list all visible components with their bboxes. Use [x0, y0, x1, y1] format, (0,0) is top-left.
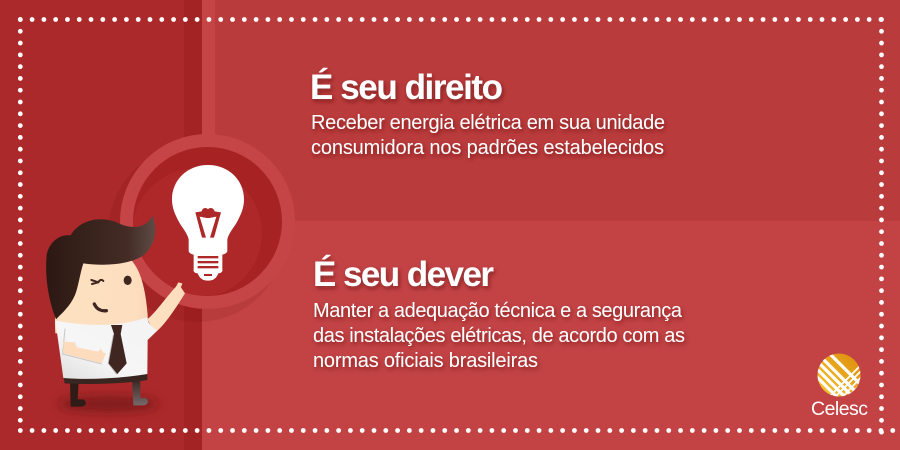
text block: dever: [313, 300, 685, 372]
logo: Celesc: [812, 354, 868, 415]
open eye: [124, 276, 132, 285]
heading: É seu direito: É seu direito: [310, 67, 503, 107]
text block: direito: Receber energia elétrica em sua unidade: [311, 112, 665, 134]
text block: direito: [311, 112, 665, 159]
icon: light bulb: [172, 165, 244, 281]
hair: [46, 215, 155, 319]
smile: [94, 304, 106, 311]
shirt: [55, 317, 157, 379]
folded arm: [63, 329, 106, 364]
character: office worker pointing at the bulb: [46, 215, 185, 412]
necktie: [108, 325, 127, 375]
trousers: [63, 374, 147, 384]
text block: dever: Manter a adequação técnica e a segurança: [313, 300, 683, 322]
pointing arm: [147, 282, 185, 333]
lamp medallion: [108, 134, 295, 322]
left leg and shoe: [70, 382, 86, 407]
logo: Celesc: Celesc: [811, 398, 868, 420]
right leg and shoe: [132, 379, 148, 405]
winking eye: [91, 280, 103, 284]
text block: direito: consumidora nos padrões estabelecidos: [311, 137, 664, 159]
ear: [67, 281, 78, 291]
text block: dever: normas oficiais brasileiras: [313, 350, 538, 372]
text block: dever: das instalações elétricas, de acordo com as: [313, 325, 685, 347]
shadow under feet: [58, 396, 158, 412]
head: [55, 250, 149, 333]
heading: É seu dever: É seu dever: [313, 254, 494, 294]
